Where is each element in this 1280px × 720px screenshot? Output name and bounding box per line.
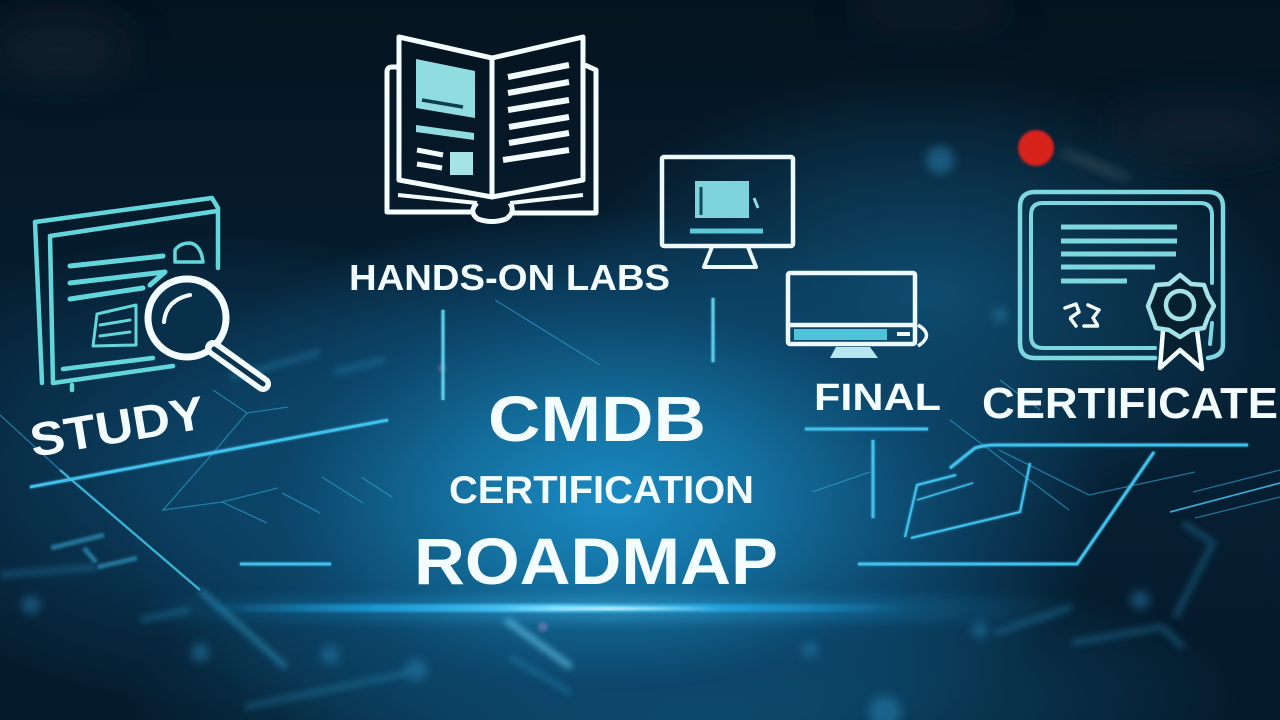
icon: certificate (1020, 192, 1223, 358)
icon: open book (387, 37, 596, 222)
title: CMDB (488, 383, 706, 455)
label: study: STUDY (26, 386, 208, 467)
icon: award seal (1148, 275, 1214, 369)
red light (1018, 130, 1134, 185)
label: certificate: CERTIFICATE (982, 379, 1278, 428)
circuit lines (30, 298, 1248, 564)
title (414, 383, 778, 598)
label: final: FINAL (814, 377, 941, 419)
icon: exam terminal (788, 273, 926, 358)
label: hands-on labs: HANDS-ON LABS (349, 257, 670, 298)
icon: monitor (662, 157, 793, 267)
horizon flare (130, 596, 1090, 622)
title: ROADMAP (414, 524, 778, 598)
icon: magnifying glass (148, 279, 263, 384)
icon: study document (35, 198, 218, 390)
title: CERTIFICATION (449, 469, 754, 512)
